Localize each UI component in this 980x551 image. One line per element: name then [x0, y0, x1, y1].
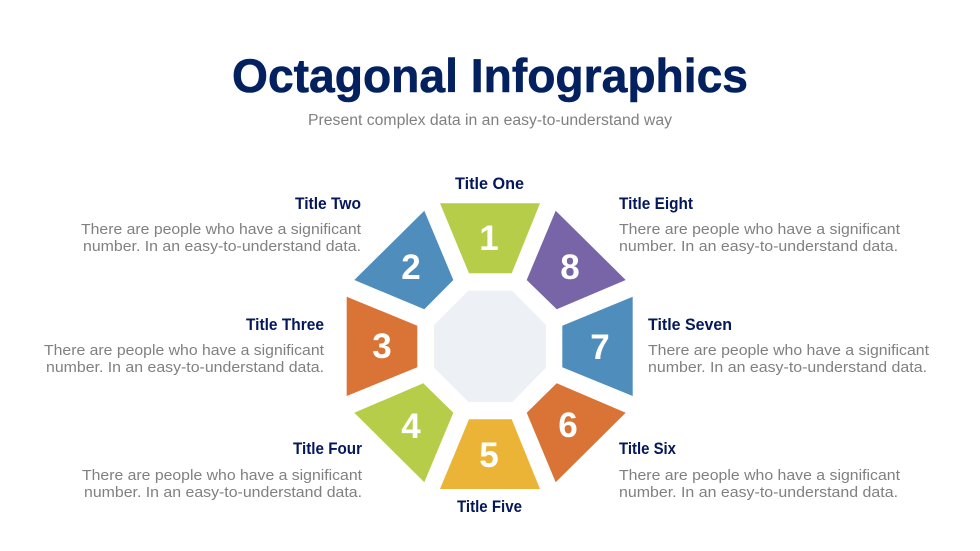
text block: title seven: There are people who have a significant: [648, 342, 930, 359]
text block: title six: [619, 440, 901, 501]
text block: title four: number. In an easy-to-understand data.: [84, 484, 362, 501]
text block: title six: Title Six: [619, 440, 677, 458]
segment 4: 4: [401, 407, 421, 446]
segment 8: [527, 211, 626, 309]
center octagon: [434, 291, 546, 402]
segment 2: 2: [401, 248, 421, 287]
label: title one: Title One: [455, 175, 524, 193]
text block: title three: number. In an easy-to-understand data.: [46, 359, 324, 376]
text block: title seven: Title Seven: [648, 316, 732, 334]
segment 7: [562, 297, 633, 396]
text block: title two: [81, 195, 362, 255]
segment 5: [440, 419, 540, 489]
segment 5: 5: [479, 436, 499, 475]
segment 3: [347, 297, 417, 396]
segment 6: 6: [558, 406, 578, 445]
octagon diagram: [347, 203, 633, 489]
text block: title eight: Title Eight: [619, 195, 693, 213]
segment 6: [527, 383, 626, 482]
segment 3: 3: [372, 327, 392, 366]
title: Octagonal Infographics: [232, 50, 748, 103]
segment 1: 1: [479, 219, 499, 258]
text block: title eight: There are people who have a significant: [619, 221, 901, 238]
text block: title eight: [619, 195, 901, 255]
text block: title seven: [648, 316, 930, 376]
text block: title six: number. In an easy-to-understand data.: [619, 484, 898, 501]
subtitle: Present complex data in an easy-to-understand way: [308, 112, 672, 129]
segment 1: [440, 203, 540, 273]
segment 4: [354, 383, 453, 482]
text block: title four: [82, 440, 363, 501]
text block: title seven: number. In an easy-to-understand data.: [648, 359, 927, 376]
text block: title four: Title Four: [293, 440, 363, 458]
text block: title two: number. In an easy-to-understand data.: [83, 238, 361, 255]
text block: title six: There are people who have a significant: [619, 467, 901, 484]
text block: title four: There are people who have a significant: [82, 467, 363, 484]
label: title five: Title Five: [457, 498, 522, 516]
segment 2: [354, 211, 453, 309]
text block: title three: There are people who have a significant: [44, 342, 325, 359]
text block: title eight: number. In an easy-to-understand data.: [619, 238, 898, 255]
segment 7: 7: [590, 328, 610, 367]
text block: title three: Title Three: [246, 316, 324, 334]
text block: title two: There are people who have a significant: [81, 221, 362, 238]
segment 8: 8: [560, 248, 580, 287]
text block: title three: [44, 316, 325, 376]
text block: title two: Title Two: [295, 195, 361, 213]
